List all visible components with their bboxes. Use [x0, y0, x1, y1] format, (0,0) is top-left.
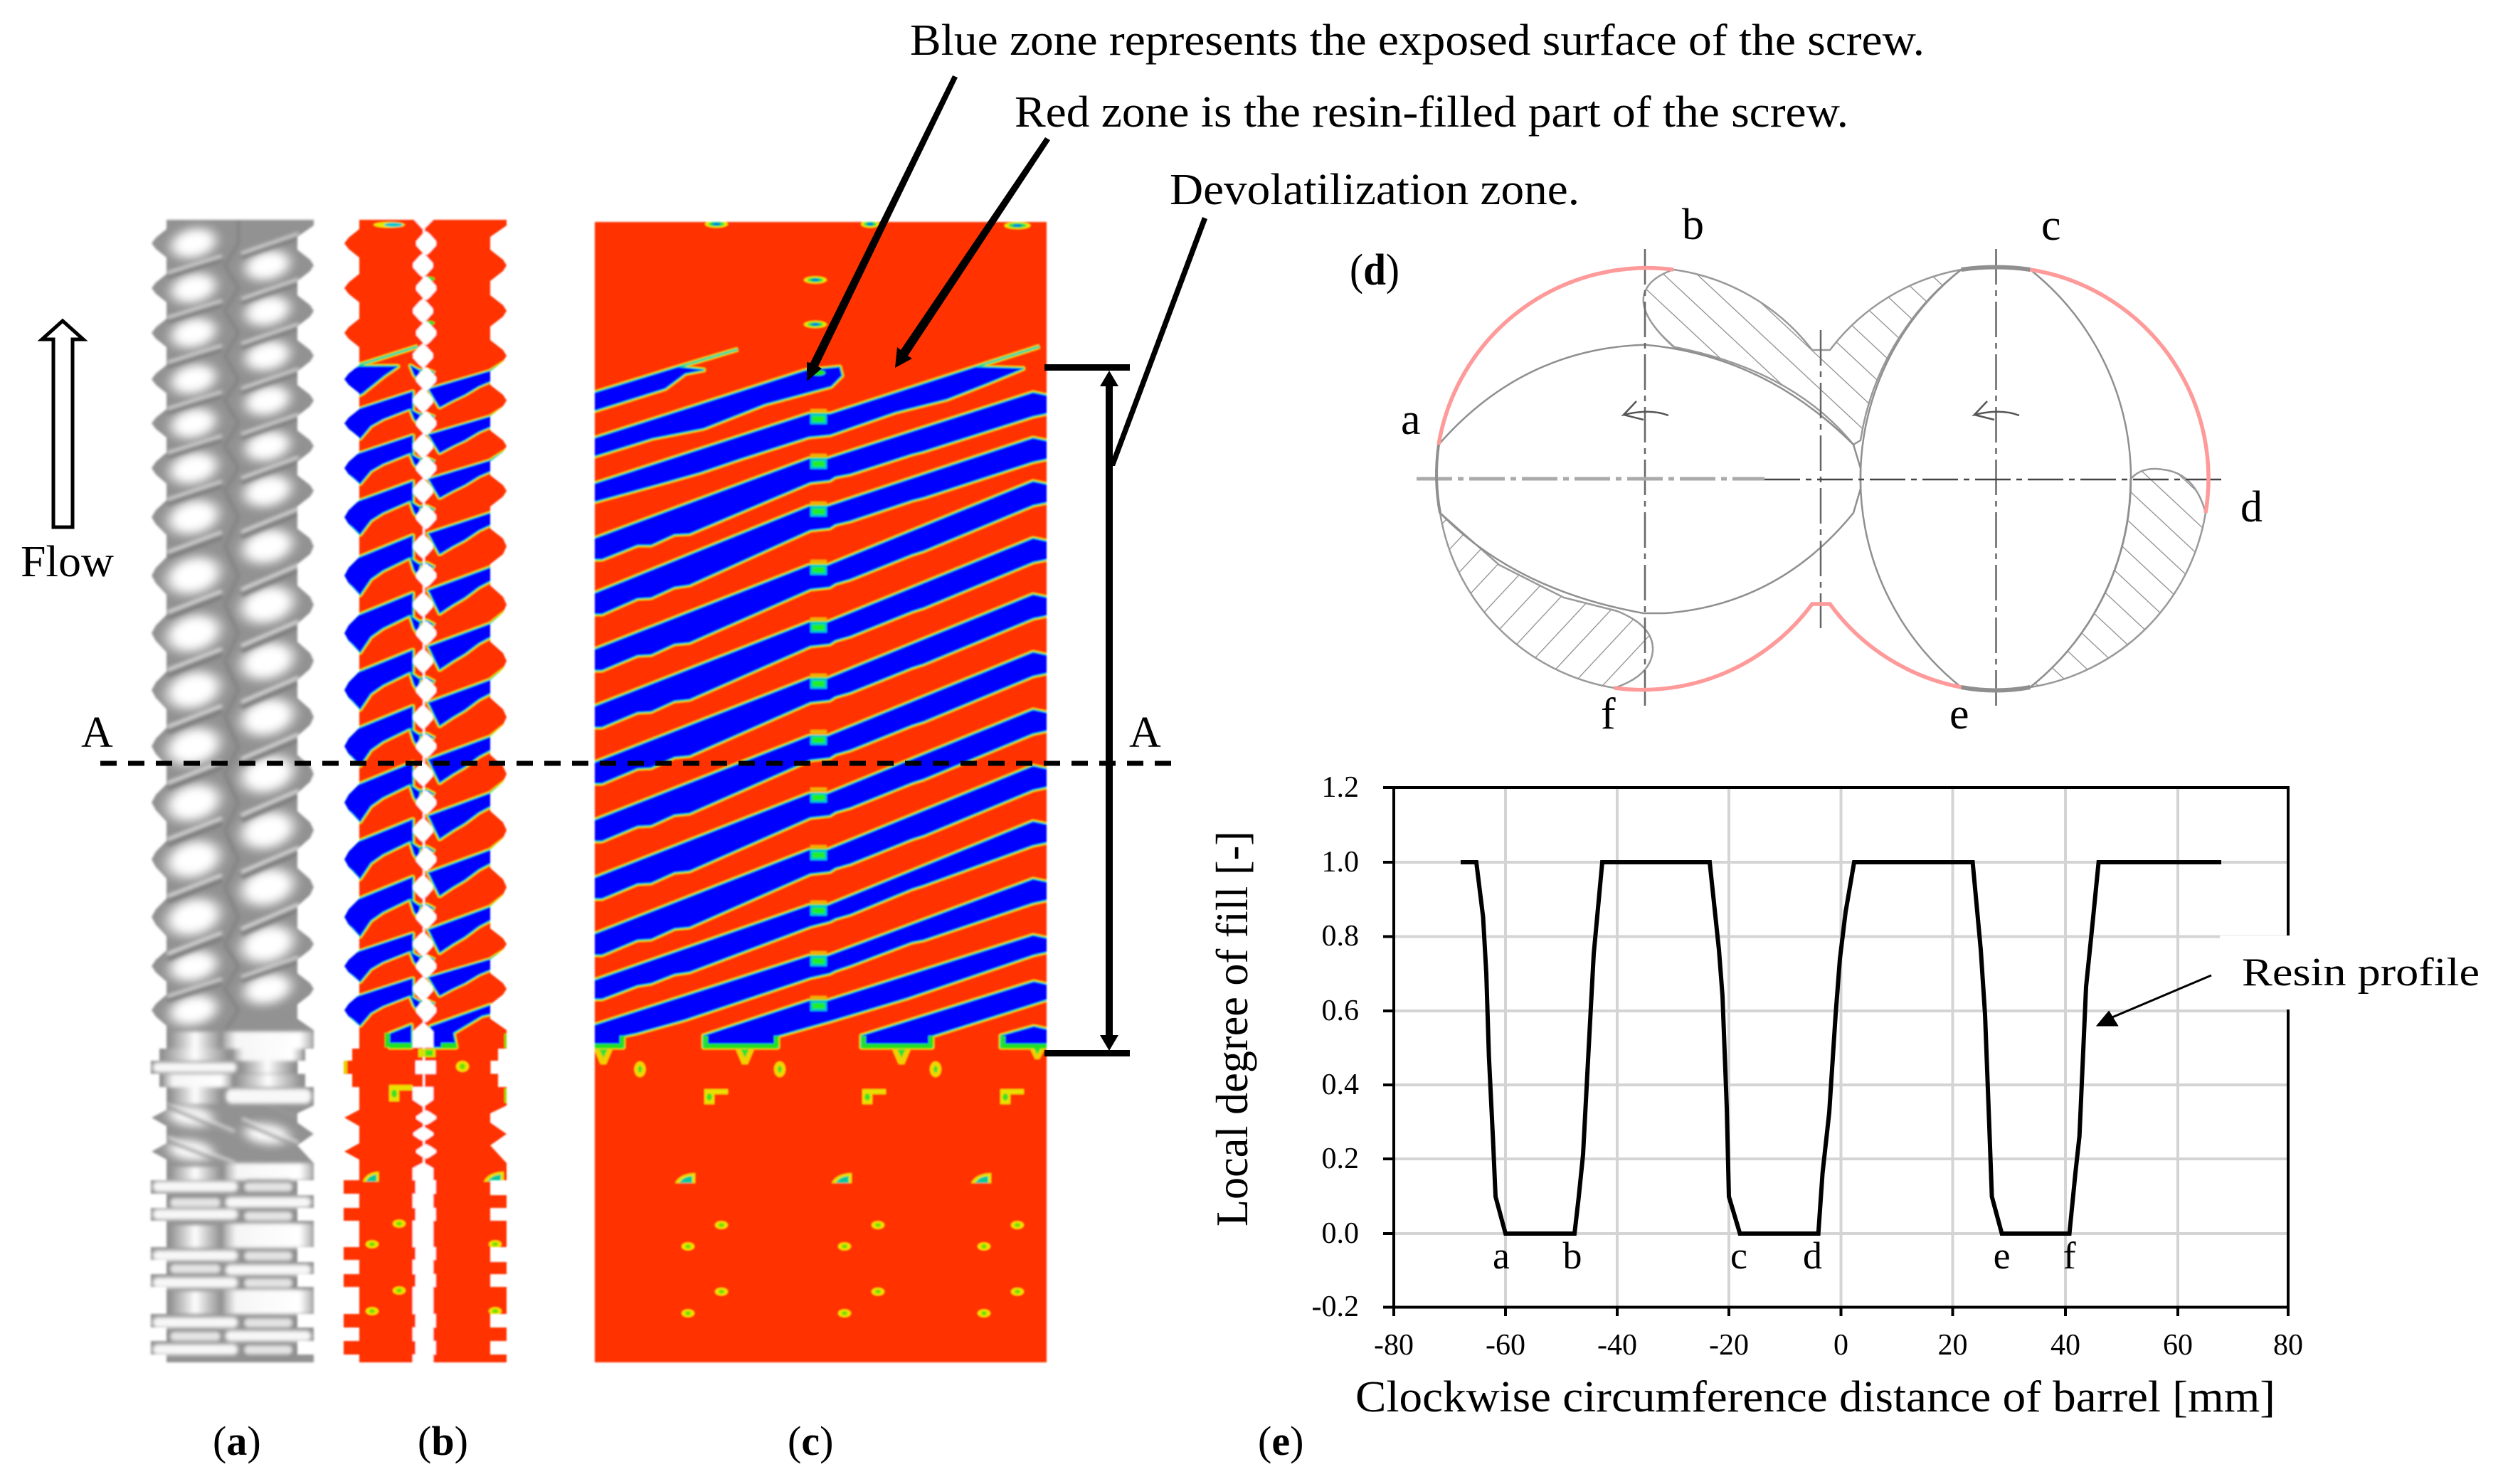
- point labels a to f: f: [2063, 1234, 2076, 1277]
- panel d labels: d: [2240, 483, 2263, 531]
- panel caption c: (c): [788, 1418, 833, 1464]
- white callout mask: [2220, 936, 2503, 1009]
- x tick labels: [1374, 1329, 2303, 1362]
- point labels a to f: e: [1994, 1234, 2011, 1277]
- panel c: unrolled barrel surface fill map: [594, 221, 1047, 1362]
- y tick labels: 0.0: [1322, 1217, 1359, 1250]
- section label A right: A: [1129, 709, 1161, 757]
- arrow: blue zone pointer: [807, 75, 958, 381]
- panel caption e: (e): [1258, 1418, 1303, 1464]
- y tick labels: 0.4: [1322, 1069, 1359, 1101]
- y tick labels: 0.6: [1322, 995, 1359, 1027]
- point labels a to f: [1493, 1234, 2076, 1277]
- devolatilization zone bracket with double arrow: [1044, 217, 1207, 1056]
- flow direction arrow: [42, 321, 83, 527]
- panel e: local degree of fill chart: [1207, 771, 2503, 1421]
- y tick labels: 1.2: [1322, 771, 1359, 804]
- panel d labels: (d): [1350, 246, 1399, 295]
- point labels a to f: a: [1493, 1234, 1510, 1277]
- x axis title: Clockwise circumference distance of barrel [mm]: [1355, 1373, 2275, 1421]
- white gap between screws: [413, 220, 436, 1362]
- y tick labels: 1.0: [1322, 846, 1359, 879]
- y tick labels: -0.2: [1312, 1290, 1359, 1323]
- panel caption b: (b): [418, 1418, 468, 1464]
- panel d labels: f: [1601, 690, 1616, 738]
- arrow: red zone pointer: [895, 137, 1050, 368]
- right screw profile: [1861, 270, 2131, 687]
- panel d labels: a: [1401, 396, 1421, 444]
- y tick labels: [1312, 771, 1359, 1323]
- x tick labels: 0: [1833, 1329, 1848, 1362]
- y tick labels: 0.8: [1322, 920, 1359, 953]
- x tick labels: -40: [1597, 1329, 1637, 1362]
- top annotation text: red zone: Red zone is the resin-filled part of the screw.: [1015, 88, 1848, 137]
- resin profile arrow: [2098, 975, 2211, 1025]
- flow label: Flow: [21, 538, 114, 586]
- panel d labels: b: [1682, 201, 1704, 249]
- x tick labels: 60: [2163, 1329, 2193, 1362]
- blue exposed regions on screw: [342, 222, 507, 1315]
- section label A left: A: [81, 709, 113, 757]
- panel d labels: c: [2041, 201, 2061, 250]
- section line A-A: [100, 761, 1180, 765]
- annotation text: devolatilization zone: Devolatilization zone.: [1170, 166, 1579, 214]
- x tick labels: 40: [2050, 1329, 2080, 1362]
- x tick labels: 20: [1938, 1329, 1968, 1362]
- x tick labels: -20: [1709, 1329, 1749, 1362]
- hatched resin regions: [1440, 270, 2206, 688]
- x tick labels: -60: [1486, 1329, 1525, 1362]
- blue exposed helical stripes: [594, 221, 1047, 1318]
- x tick labels: -80: [1374, 1329, 1414, 1362]
- y tick labels: 0.2: [1322, 1143, 1359, 1175]
- point labels a to f: c: [1730, 1234, 1747, 1277]
- panel d labels: [1350, 201, 2263, 738]
- leader line to devolatilization label: [1109, 217, 1207, 466]
- resin profile label: Resin profile: [2242, 950, 2480, 995]
- plot frame and ticks: [1383, 788, 2288, 1316]
- rotation arrows: [1624, 401, 2019, 420]
- y axis title: Local degree of fill [-]: [1207, 831, 1257, 1226]
- panel caption a: (a): [213, 1418, 261, 1464]
- panel d: barrel cross-section diagram: [1417, 249, 2225, 708]
- center lines: [1417, 249, 2225, 708]
- pink barrel arcs: [1439, 268, 2208, 690]
- point labels a to f: b: [1562, 1234, 1582, 1277]
- panel a: twin screw geometry: [151, 220, 314, 1362]
- left screw profile: [1439, 345, 1861, 613]
- top annotation text: blue zone: Blue zone represents the exposed surface of the screw.: [910, 16, 1925, 65]
- panel b: fill state on screw surface: [342, 220, 507, 1362]
- gridlines: [1394, 788, 2288, 1307]
- gray barrel arcs: [1436, 267, 2031, 690]
- point labels a to f: d: [1803, 1234, 1822, 1277]
- x tick labels: 80: [2273, 1329, 2303, 1362]
- resin profile curve: [1461, 862, 2221, 1234]
- panel d labels: e: [1949, 690, 1969, 738]
